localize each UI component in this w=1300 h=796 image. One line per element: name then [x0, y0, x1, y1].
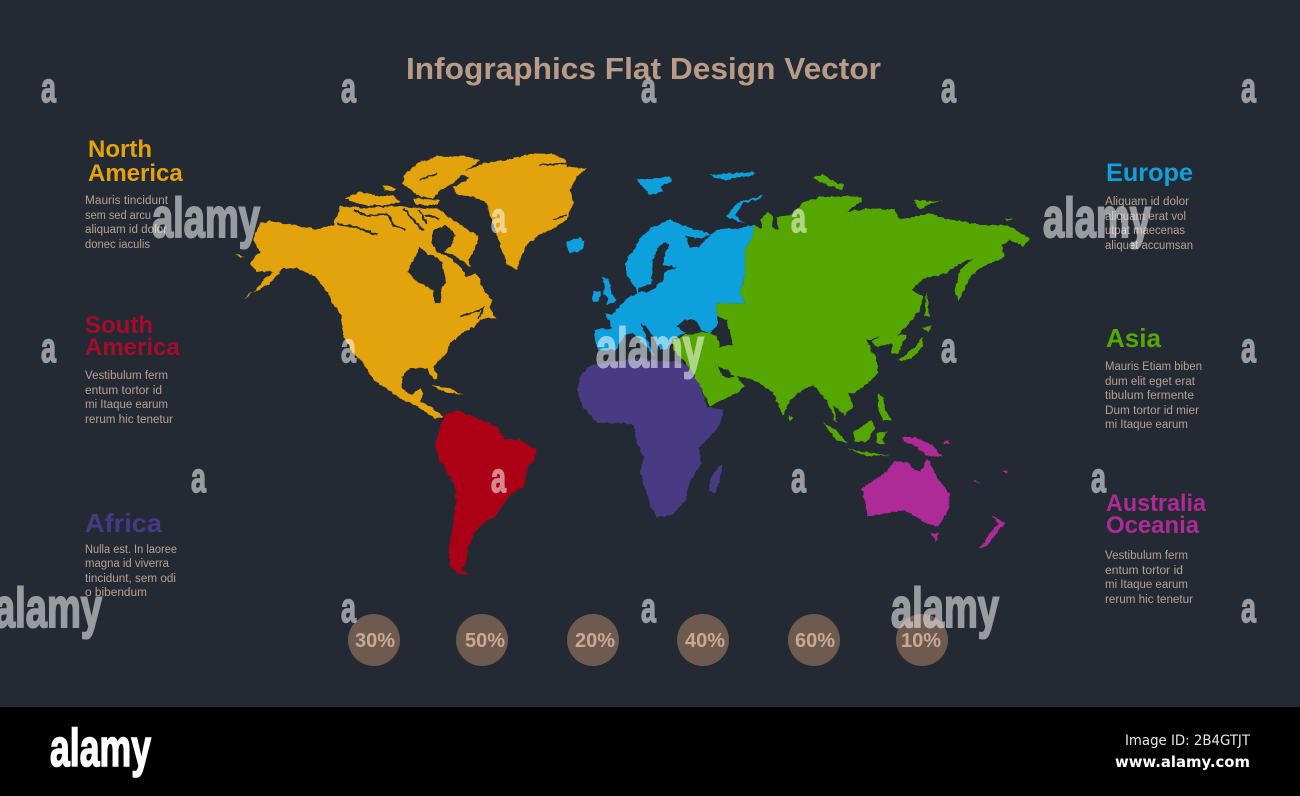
image id: Image ID: 2B4GTJT — [1125, 733, 1250, 749]
panel: south america: South — [85, 312, 153, 339]
continent: australia and oceania — [862, 437, 1008, 548]
continent: north america — [235, 153, 587, 419]
panel: australia oceania: Australia — [1106, 490, 1207, 517]
percentage badges: 60% — [795, 630, 835, 652]
watermark overlay: a — [941, 64, 956, 111]
panel: asia: mi Itaque earum — [1105, 419, 1188, 431]
watermark overlay: a — [1091, 454, 1106, 501]
panel: africa — [85, 508, 177, 599]
continent: south america — [435, 410, 537, 575]
panel: north america: North — [88, 136, 152, 163]
watermark overlay: a — [791, 454, 806, 501]
panel: europe: Aliquam id dolor — [1105, 196, 1189, 208]
watermark overlay: alamy — [152, 186, 260, 249]
panel: asia: Asia — [1106, 323, 1162, 353]
panel: north america: Mauris tincidunt — [85, 195, 169, 207]
watermark overlay: a — [1241, 324, 1256, 371]
watermark overlay: a — [191, 454, 206, 501]
watermark overlay: a — [791, 194, 806, 241]
panel: australia oceania: Vestibulum ferm — [1105, 550, 1188, 562]
panel: australia oceania — [1105, 490, 1207, 606]
percentage badges: 30% — [355, 630, 395, 652]
continent: asia — [673, 173, 1030, 456]
panel: europe — [1105, 159, 1193, 252]
title: Infographics Flat Design Vector — [406, 51, 881, 86]
foxe basin — [432, 225, 471, 277]
hudson bay — [407, 247, 446, 303]
panel: south america: Vestibulum ferm — [85, 370, 168, 382]
panel: asia: tibulum fermente — [1105, 390, 1194, 402]
panel: south america: mi Itaque earum — [85, 399, 168, 411]
panel: australia oceania: mi Itaque earum — [1105, 579, 1188, 591]
panel: north america: America — [88, 160, 183, 187]
panel: africa: o bibendum — [85, 587, 147, 599]
panel: africa: Africa — [85, 508, 163, 538]
panel: africa: Nulla est. In laoree — [85, 544, 177, 556]
watermark overlay: alamy — [891, 576, 999, 639]
percentage badges — [348, 614, 948, 666]
panel: asia: Dum tortor id mier — [1105, 405, 1199, 417]
watermark overlay: a — [341, 584, 356, 631]
footer logo: alamy — [50, 719, 151, 778]
panel: europe: Europe — [1106, 159, 1193, 187]
panel: north america: sem sed arcu — [85, 210, 151, 222]
continent: europe — [566, 172, 763, 357]
panel: north america — [85, 136, 183, 251]
watermark overlay: a — [341, 64, 356, 111]
watermark overlay: a — [641, 584, 656, 631]
panel: africa: magna id viverra — [85, 558, 170, 570]
watermark overlay: alamy — [1043, 186, 1151, 249]
watermark overlay: a — [41, 324, 56, 371]
panel: asia: Mauris Etiam biben — [1105, 361, 1202, 373]
watermark overlay: a — [41, 64, 56, 111]
website: www.alamy.com — [1115, 753, 1250, 771]
panel: australia oceania: entum tortor id — [1105, 565, 1183, 577]
world map — [235, 153, 1030, 575]
continent: africa — [577, 358, 724, 517]
panel: europe: aliquam erat vol — [1105, 211, 1186, 223]
percentage badges: 50% — [465, 630, 505, 652]
percentage badges: 40% — [685, 630, 725, 652]
watermark overlay — [0, 64, 1256, 639]
panel: africa: tincidunt, sem odi — [85, 573, 176, 585]
percentage badges: 20% — [575, 630, 615, 652]
panel: south america: America — [85, 334, 180, 361]
panel: south america: entum tortor id — [85, 385, 162, 397]
panel: north america: aliquam id dolor — [85, 224, 167, 236]
panel: south america — [85, 312, 180, 426]
panel: asia — [1105, 323, 1202, 431]
panel: asia: dum elit eget erat — [1105, 376, 1196, 388]
watermark overlay: a — [491, 454, 506, 501]
watermark overlay: alamy — [596, 316, 704, 379]
watermark overlay: a — [941, 324, 956, 371]
watermark overlay: a — [1241, 584, 1256, 631]
watermark overlay: a — [641, 64, 656, 111]
panel: australia oceania: rerum hic tenetur — [1105, 594, 1193, 606]
percentage badges: 10% — [901, 630, 941, 652]
panel: australia oceania: Oceania — [1106, 512, 1200, 539]
panel: south america: rerum hic tenetur — [85, 414, 173, 426]
panel: north america: donec iaculis — [85, 239, 150, 251]
watermark overlay: a — [1241, 64, 1256, 111]
watermark overlay: a — [341, 324, 356, 371]
footer band — [0, 707, 1300, 796]
panel: europe: utpat maecenas — [1105, 225, 1185, 237]
watermark overlay: a — [491, 194, 506, 241]
panel: europe: aliquet accumsan — [1105, 240, 1193, 252]
